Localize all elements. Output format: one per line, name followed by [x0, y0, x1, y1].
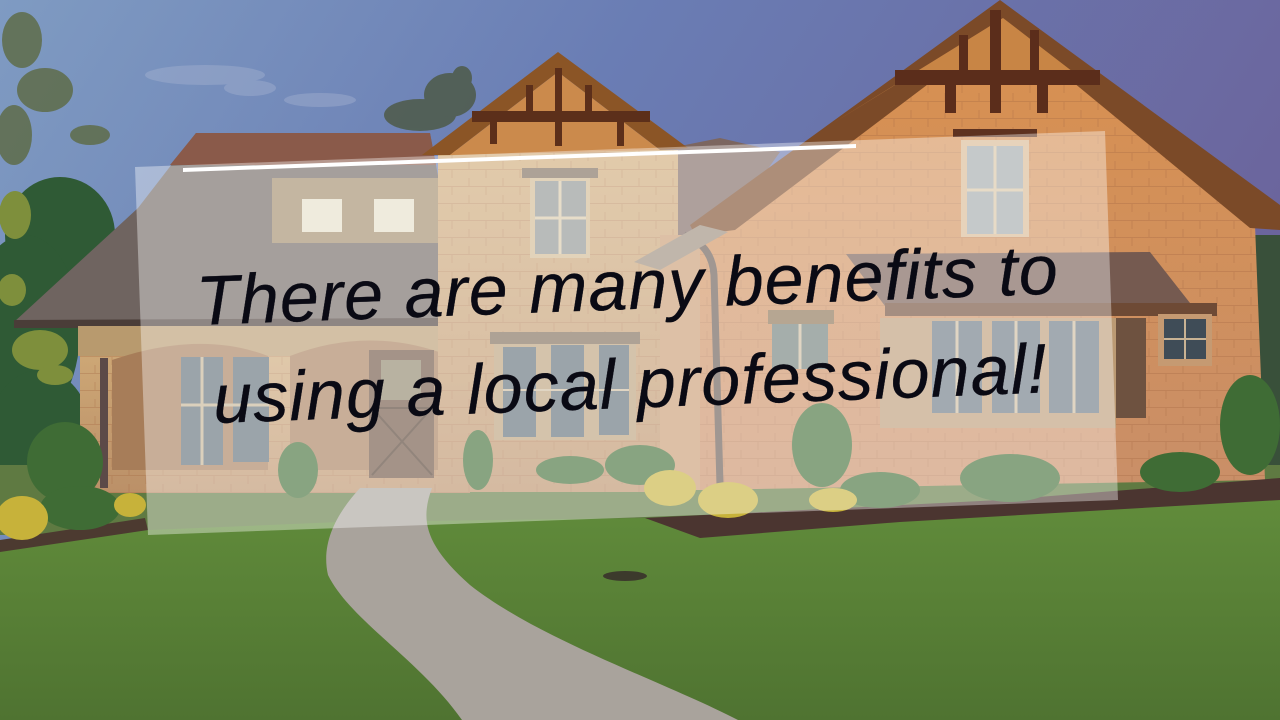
front door: [369, 350, 434, 478]
middle window: [768, 310, 834, 369]
left wing roof: [14, 133, 450, 330]
left ground windows: [181, 357, 269, 465]
clouds: [145, 65, 356, 107]
left wing walls: [80, 328, 470, 493]
centre tower: [438, 150, 678, 492]
translucent text panel: [135, 131, 1118, 535]
centre ground windows: [490, 332, 640, 440]
centre gable: [422, 52, 688, 155]
headline line 2: using a local professional!: [212, 329, 1048, 438]
small right window: [1158, 314, 1212, 366]
porch arches: [112, 344, 268, 470]
gutter pipe: [684, 235, 720, 485]
upper right window: [953, 129, 1037, 137]
right gable trim: [690, 0, 1280, 235]
headline line 1: There are many benefits to: [195, 230, 1059, 340]
right porch roof: [846, 252, 1190, 306]
accent line: [183, 144, 856, 172]
porch post: [100, 358, 108, 488]
walkway: [326, 488, 738, 720]
stepping stone: [603, 571, 647, 581]
headline: [195, 230, 1059, 438]
right bay windows: [880, 318, 1146, 428]
right wing walls: [700, 20, 1265, 490]
background trees: [0, 12, 1280, 490]
connecting wall: [660, 235, 730, 490]
dormer: [272, 178, 439, 243]
ground behind planting: [0, 465, 1280, 535]
house: [14, 0, 1280, 493]
centre upper window: [522, 168, 598, 258]
lawn: [0, 498, 1280, 720]
garden beds: [0, 375, 1280, 552]
